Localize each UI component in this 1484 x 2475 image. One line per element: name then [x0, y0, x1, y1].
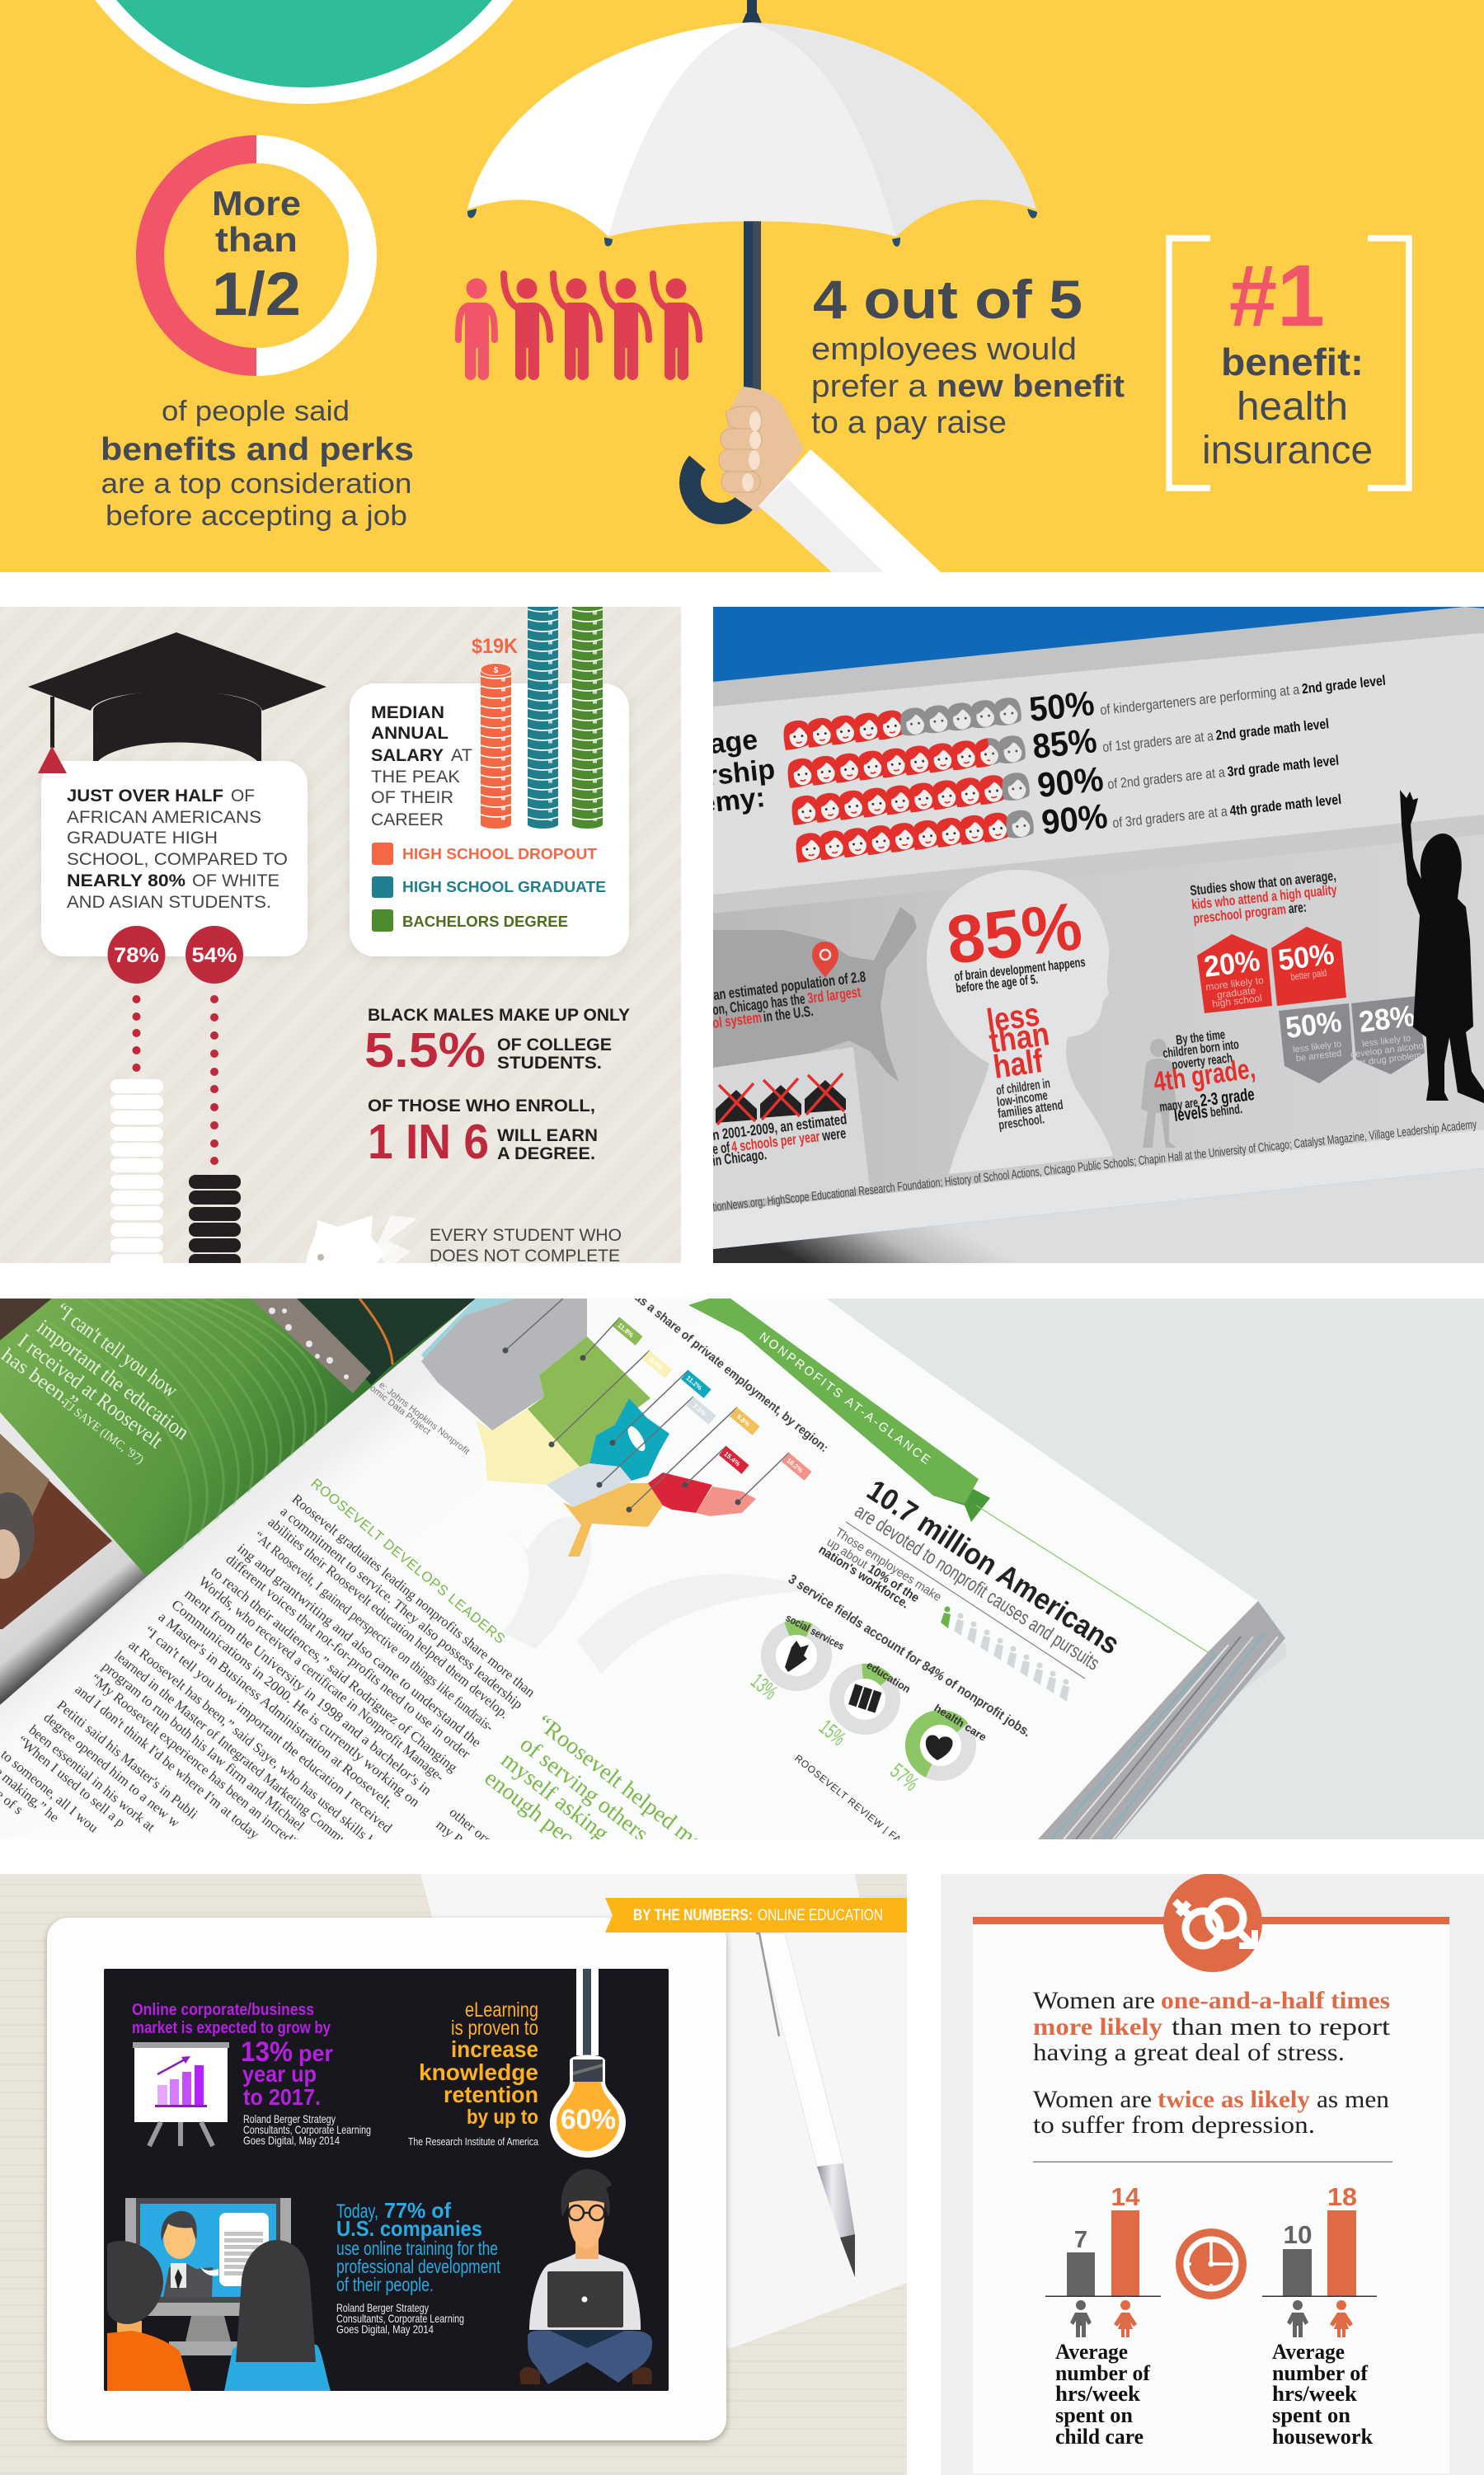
text: 10.7 million Americans: Those employees make — [833, 1525, 944, 1604]
badges: preschool outcome percentages — [1197, 927, 1426, 1083]
map: nonprofit employment by region: 15.4% — [722, 1450, 742, 1468]
icon: child head silhouette with brain statistic: 85% — [943, 889, 1086, 979]
panel: stress and gender infographic — [941, 1874, 1484, 2475]
text: grade level statistics: of 1st graders are at a — [1101, 728, 1214, 755]
text: quality preschool studies: preschool program — [1192, 901, 1287, 927]
map: nonprofit employment by region: 5.4% — [648, 1356, 664, 1371]
text: grade level statistics: 50% — [1027, 683, 1097, 729]
article body text: Roosevelt graduates leading nonprofits share more than — [289, 1491, 538, 1701]
badges: preschool outcome percentages: be arrested — [1295, 1049, 1342, 1064]
badges: preschool outcome percentages: 20% — [1202, 943, 1261, 984]
text: fourth grade poverty: 2-3 grade — [1199, 1085, 1256, 1111]
text: fourth grade poverty: levels — [1173, 1102, 1209, 1125]
text: stress statistics — [1033, 1987, 1391, 2139]
text: grade level statistics — [1027, 673, 1387, 842]
map: nonprofit employment by region — [421, 1299, 812, 1557]
text: benefits and perks: before accepting a job — [106, 500, 407, 532]
pull quote on the photo: important the education — [32, 1315, 194, 1444]
icon: reaching child silhouette — [1400, 790, 1484, 1103]
text: fourth grade poverty: 4th grade, — [1152, 1053, 1257, 1098]
text: black males 5.5 percent: OF COLLEGE — [497, 1036, 612, 1054]
text: 4 out of 5: 4 out of 5 — [813, 269, 1082, 330]
text: map source: omic Data Project — [368, 1383, 432, 1437]
badges: preschool outcome percentages: develop an alcohol — [1350, 1040, 1426, 1060]
icon: graduation cap — [28, 632, 326, 773]
badges: preschool outcome percentages: high school — [1212, 992, 1262, 1010]
text: eLearning retention: knowledge — [419, 2059, 538, 2085]
text: grade level statistics: 85% — [1031, 721, 1099, 766]
text: eLearning retention: increase — [451, 2036, 538, 2062]
text: 4 out of 5: new benefit — [937, 369, 1125, 404]
text: black males 5.5 percent: BLACK MALES MAKE UP ONLY — [368, 1006, 630, 1025]
ribbon: nonprofits at a glance: NONPROFITS AT-A-GLANCE — [757, 1330, 932, 1468]
text: quality preschool studies: are: — [1288, 899, 1308, 917]
map: United States silhouette with Chicago pin — [713, 907, 917, 1082]
bar chart: child care hours: number of — [1055, 2361, 1150, 2385]
card: closed schools: n 2001-2009, an estimated — [713, 1111, 848, 1144]
text: corporate market growth: per — [298, 2041, 333, 2066]
banner: by the numbers: BY THE NUMBERS: — [633, 1907, 753, 1924]
banner: by the numbers — [605, 1898, 907, 1933]
map: nonprofit employment by region: 11.8% — [616, 1322, 635, 1339]
icon: row of five people with raised hands — [458, 274, 699, 380]
tablet frame — [47, 1918, 726, 2440]
badges: preschool outcome percentages: more likely to — [1205, 975, 1265, 993]
text: Chicago school system: in the U.S. — [763, 1003, 815, 1025]
icon: umbrella held in a hand — [467, 0, 1037, 572]
callout: graduation rates: NEARLY 80% — [67, 871, 186, 890]
panel: yellow benefits and perks infographic — [0, 0, 1484, 572]
card: closed schools: were — [820, 1125, 847, 1144]
article body text: Worlds, who received a certificate in Nonprofit Manage- — [195, 1573, 448, 1785]
icon: light bulb with 60 percent — [550, 1969, 626, 2158]
article body text: “When I used to sell a p — [14, 1732, 129, 1830]
bar chart: housework hours: housework — [1272, 2425, 1374, 2449]
text: 77 percent of U.S. companies: of their people. — [336, 2274, 434, 2295]
card: closed schools — [711, 1047, 870, 1204]
text: corporate market growth: 13% — [241, 2036, 293, 2068]
text: every student who does not complete: EVERY STUDENT WHO — [430, 1226, 622, 1245]
banner: by the numbers: ONLINE EDUCATION — [758, 1907, 883, 1924]
text: corporate market growth: to 2017. — [243, 2084, 321, 2110]
map: nonprofit employment by region: 16.2% — [785, 1457, 805, 1474]
icon: child head silhouette with brain statistic: low-income — [996, 1088, 1049, 1110]
icon: child head silhouette with brain statistic: of children in — [995, 1077, 1051, 1098]
bar chart: housework hours: Average — [1272, 2340, 1345, 2364]
text: stress statistics: Women are — [1033, 1987, 1155, 2014]
bar chart: housework hours: hrs/week — [1272, 2382, 1358, 2406]
chart: health care donut: 57% — [885, 1759, 923, 1796]
text: one in six earn a degree: OF THOSE WHO ENROLL, — [368, 1097, 595, 1115]
pull quote on the photo: I received at Roosevelt — [13, 1329, 168, 1454]
article body text: degree opened him to a new w — [40, 1709, 183, 1831]
text: stress statistics: having a great deal of stress. — [1033, 2039, 1345, 2066]
callout: graduation rates — [41, 761, 308, 956]
text: fourth grade poverty: children born into — [1162, 1038, 1240, 1061]
text: eLearning retention: by up to — [467, 2106, 538, 2129]
text: eLearning retention: The Research Institute of America — [408, 2135, 539, 2148]
chart: coin stacks of salary — [472, 607, 603, 829]
chart: social services donut: social services — [784, 1611, 847, 1652]
article body text: ment from the University in 1998 and a bachelor's in — [181, 1585, 435, 1798]
callout: median annual salary — [350, 683, 629, 956]
text: 77 percent of U.S. companies: use online training for the — [336, 2238, 498, 2259]
text: stress statistics: than men to report — [1172, 2013, 1391, 2041]
badges: preschool outcome percentages: 50% — [1276, 937, 1336, 977]
text: benefits and perks: benefits and perks — [101, 432, 414, 467]
brochure sheet — [713, 607, 1484, 1249]
text: quality preschool studies — [1189, 867, 1338, 927]
bar chart: housework hours: spent on — [1272, 2403, 1351, 2427]
article body text — [0, 1491, 538, 1859]
pull quote on the photo: TJ SAYE (IMC, '97) — [59, 1397, 146, 1467]
text: 4 out of 5: prefer a — [811, 369, 928, 404]
text: every student who does not complete — [430, 1226, 622, 1266]
legend: education levels — [372, 843, 606, 932]
chart: 78 percent stack of white bars — [107, 926, 165, 1268]
callout: number one benefit in brackets: #1 — [1229, 247, 1325, 345]
ribbon: nonprofits at a glance — [688, 1299, 1208, 1652]
chart: education donut: education — [864, 1659, 913, 1695]
map: nonprofit employment by region: 7.1% — [692, 1402, 707, 1417]
donut: more than one half: More — [212, 184, 301, 223]
text: corporate market growth — [132, 2001, 333, 2110]
text: stress statistics: one-and-a-half times — [1161, 1987, 1390, 2014]
badges: preschool outcome percentages: less likely to — [1292, 1039, 1342, 1055]
icon: small child silhouette — [1141, 1039, 1176, 1148]
text: benefits and perks: of people said — [162, 396, 350, 427]
text: 10.7 million Americans: up about 10% of the — [824, 1535, 922, 1605]
text: 10.7 million Americans: are devoted to nonprofit causes and pursuits — [851, 1500, 1103, 1675]
chart: 78 percent stack of white bars: 78% — [114, 944, 159, 967]
callout: median annual salary: ANNUAL — [371, 724, 448, 743]
bar chart: housework hours: 10 — [1283, 2220, 1313, 2249]
bar chart: child care hours: 14 — [1111, 2182, 1140, 2211]
chart: social services donut: 13% — [746, 1669, 782, 1704]
left page with photo — [0, 1299, 476, 1705]
icon: child head silhouette with brain statistic: half — [991, 1043, 1045, 1086]
card: closed schools: 4 schools per year — [730, 1128, 821, 1155]
text: source one: Roland Berger Strategy — [243, 2112, 336, 2125]
chart: health care donut: health care — [932, 1702, 989, 1744]
map: nonprofit employment by region: 9.8% — [735, 1413, 751, 1428]
text: grade level statistics: 2nd grade math level — [1215, 716, 1330, 744]
text: 4 out of 5: to a pay raise — [811, 406, 1007, 440]
text: eLearning retention: eLearning — [465, 1998, 538, 2022]
callout: median annual salary: THE PEAK — [371, 768, 460, 787]
article body text: Communications in 2000. He is currently working on — [168, 1596, 423, 1810]
card — [973, 1921, 1449, 2473]
text: benefits and perks: are a top consideration — [101, 468, 412, 500]
text: quality preschool studies: Studies show that on average, — [1189, 867, 1336, 899]
heading: cropped title — [698, 724, 777, 820]
illustration: man with laptop — [519, 2169, 652, 2384]
text: grade level statistics: 90% — [1040, 796, 1110, 842]
article body text: a Master's in Business Administration at Roosevelt. — [155, 1609, 397, 1812]
article body text: to someone, all I wou — [0, 1746, 101, 1836]
panel: African American graduation infographic — [0, 607, 681, 1263]
text: fourth grade poverty: many are — [1158, 1096, 1199, 1115]
article body text: Petitti said his Master's in Publi — [54, 1697, 201, 1822]
text: grade level statistics: of 2nd graders are at a — [1106, 764, 1226, 792]
text: black males 5.5 percent: 5.5% — [364, 1023, 486, 1078]
icon: presentation board with bars — [133, 2042, 229, 2146]
icon: light bulb with 60 percent: 60% — [561, 2104, 616, 2135]
callout: number one benefit in brackets: benefit: — [1221, 340, 1364, 383]
article body text: “At Roosevelt, I gained perspective on things like fundrais- — [251, 1528, 497, 1735]
bar chart: child care hours: child care — [1055, 2425, 1144, 2449]
text: eLearning retention — [408, 1998, 539, 2148]
icon: child head silhouette with brain statistic: less — [984, 996, 1042, 1040]
panel: open magazine photo — [0, 1299, 1484, 1839]
text: source one — [243, 2112, 371, 2147]
text: 77 percent of U.S. companies — [336, 2198, 500, 2295]
bar chart: housework hours: number of — [1272, 2361, 1368, 2385]
badges: preschool outcome percentages: 50% — [1284, 1004, 1343, 1045]
bar chart: housework hours: 18 — [1327, 2182, 1357, 2211]
legend: education levels: BACHELORS DEGREE — [402, 913, 568, 930]
text: three service fields: 3 service fields account for 84% of nonprofit jobs. — [786, 1572, 1033, 1740]
badges: preschool outcome percentages: or drug problem — [1357, 1050, 1422, 1068]
badges: preschool outcome percentages: better paid — [1290, 967, 1327, 983]
bar chart: child care hours: 7 — [1074, 2227, 1087, 2253]
text: fourth grade poverty — [1152, 1028, 1257, 1125]
text: source one: Consultants, Corporate Learning — [243, 2123, 371, 2136]
callout: graduation rates: SCHOOL, COMPARED TO — [67, 850, 288, 869]
callout: graduation rates: OF WHITE — [192, 871, 279, 890]
text: stress statistics: twice as likely — [1158, 2086, 1310, 2113]
text: source two: Goes Digital, May 2014 — [336, 2322, 434, 2336]
text: corporate market growth: year up — [242, 2061, 317, 2087]
article body text: “I can't tell you how important the education I received — [141, 1623, 395, 1836]
text: stress statistics: as men — [1317, 2086, 1389, 2113]
text: source two: Roland Berger Strategy — [336, 2301, 429, 2314]
text: one in six earn a degree: WILL EARN — [497, 1126, 598, 1145]
chart: coin stacks of salary: $19K — [472, 635, 518, 658]
text: 77 percent of U.S. companies: Today, — [336, 2200, 378, 2223]
text: map source: e: Johns Hopkins Nonprofit — [377, 1380, 472, 1457]
pen — [756, 1933, 855, 2277]
bar chart: housework hours — [1262, 2182, 1377, 2449]
callout: median annual salary: OF THEIR — [371, 788, 453, 807]
text: grade level statistics: 4th grade math level — [1229, 791, 1342, 819]
callout: median annual salary: MEDIAN — [371, 703, 444, 722]
text: grade level statistics: 90% — [1036, 759, 1106, 805]
article body text: a commitment to service. They also possess leadership — [277, 1503, 526, 1712]
callout: graduation rates: JUST OVER HALF — [67, 787, 223, 805]
text: source two: Consultants, Corporate Learning — [336, 2312, 464, 2325]
icon: broken piggy bank — [305, 1215, 417, 1270]
article body text: been essential in his work at — [26, 1721, 158, 1834]
text: 4 out of 5: employees would — [811, 332, 1077, 367]
donut: more than one half: 1/2 — [212, 260, 301, 328]
chart: social services donut — [746, 1611, 847, 1704]
text: 10.7 million Americans: 10.7 million Americans — [862, 1472, 1126, 1661]
text: quality preschool studies: kids who attend a high quality — [1190, 882, 1338, 913]
text: one in six earn a degree: 1 IN 6 — [368, 1115, 489, 1169]
text: eLearning retention: is proven to — [451, 2017, 538, 2040]
article body text: and I don't think I'd be where I'm at today — [72, 1681, 263, 1839]
icon: child head silhouette with brain statistic: than — [987, 1016, 1052, 1060]
text: 4 out of 5 — [811, 269, 1125, 440]
icon: child head silhouette with brain statistic: preschool. — [998, 1112, 1045, 1133]
text: Chicago school system: on, Chicago has the — [713, 990, 806, 1018]
badges: preschool outcome percentages: 28% — [1357, 998, 1416, 1039]
text: grade level statistics: 2nd grade level — [1301, 673, 1387, 697]
chart: education donut — [815, 1659, 913, 1750]
text: Chicago school system: ol system — [713, 1009, 763, 1031]
bar chart: child care hours: hrs/week — [1055, 2382, 1141, 2406]
legend: education levels: HIGH SCHOOL DROPOUT — [402, 846, 597, 862]
badges: preschool outcome percentages: graduate — [1216, 984, 1256, 1001]
chart: 54 percent stack of black bars — [186, 926, 243, 1268]
bar chart: child care hours: spent on — [1055, 2403, 1134, 2427]
callout: median annual salary: CAREER — [371, 810, 444, 829]
callout: number one benefit in brackets: insurance — [1202, 429, 1373, 472]
article heading: ROOSEVELT DEVELOPS LEADERS — [308, 1476, 508, 1647]
chart: education donut: 15% — [815, 1715, 851, 1750]
text: grade level statistics: of 3rd graders are at a — [1111, 803, 1228, 831]
text: grade level statistics: 3rd grade math level — [1227, 753, 1340, 780]
panel: early childhood brochure photo — [713, 607, 1484, 1263]
icon: child head silhouette with brain statistic: of brain development happens — [954, 956, 1086, 984]
text: stress statistics: more likely — [1033, 2013, 1162, 2041]
icon: child head silhouette with brain statistic: families attend — [997, 1098, 1064, 1121]
article body text: different voices that not-for-profits need to use in order — [223, 1551, 473, 1762]
text: corporate market growth: market is expected to grow by — [132, 2019, 331, 2037]
callout: graduation rates: AFRICAN AMERICANS — [67, 808, 261, 827]
bar chart: child care hours — [1045, 2182, 1161, 2449]
text: Chicago school system: 3rd largest — [806, 984, 862, 1007]
card: closed schools: in Chicago. — [713, 1146, 768, 1169]
page stack edge — [1038, 1601, 1285, 1839]
text: 77 percent of U.S. companies: professional development — [336, 2256, 500, 2277]
text: one in six earn a degree — [368, 1097, 598, 1169]
text: source two — [336, 2301, 464, 2336]
chart: coin stacks of salary: $ — [494, 666, 499, 675]
right magazine page — [0, 1299, 1258, 1839]
text: one in six earn a degree: A DEGREE. — [497, 1144, 595, 1163]
text: 77 percent of U.S. companies: U.S. companies — [336, 2216, 482, 2241]
article body text: abilities their Roosevelt education helped them develop. — [265, 1514, 512, 1721]
text: grade level statistics: of kindergarteners are performing at a — [1099, 682, 1301, 718]
text: eLearning retention: retention — [444, 2082, 538, 2107]
callout: graduation rates: OF — [231, 787, 255, 805]
map: nonprofit employment by region: 11.2% — [684, 1374, 703, 1392]
illustration: video conference audience — [107, 2198, 331, 2391]
icon: male and female symbols — [1163, 1873, 1262, 1972]
article body text: program to run both his law firm and Michael — [99, 1658, 308, 1834]
text: black males 5.5 percent: STUDENTS. — [497, 1054, 602, 1073]
text: source one: Goes Digital, May 2014 — [243, 2134, 340, 2147]
callout: number one benefit in brackets — [1169, 238, 1409, 488]
donut: more than one half — [136, 135, 377, 376]
text: stress statistics: to suffer from depression. — [1033, 2111, 1315, 2139]
text: stress statistics: Women are — [1033, 2086, 1152, 2113]
callout: graduation rates: GRADUATE HIGH — [67, 829, 218, 848]
legend: education levels: HIGH SCHOOL GRADUATE — [402, 879, 606, 895]
callout: median annual salary: AT — [451, 746, 472, 765]
badges: preschool outcome percentages: less likely to — [1361, 1033, 1411, 1050]
icon: child head silhouette with brain statistic — [927, 870, 1113, 1174]
chart: rows of student faces — [782, 697, 1035, 863]
chart: 54 percent stack of black bars: 54% — [191, 944, 237, 967]
donut: more than one half: than — [215, 220, 298, 259]
text: benefits and perks — [101, 396, 414, 532]
text: fourth grade poverty: By the time — [1175, 1028, 1226, 1048]
callout: number one benefit in brackets: health — [1237, 385, 1348, 429]
text: 77 percent of U.S. companies: 77% of — [384, 2198, 451, 2223]
text: fourth grade poverty: behind. — [1209, 1102, 1243, 1120]
icon: clock — [1176, 2228, 1247, 2299]
callout: graduation rates: AND ASIAN STUDENTS. — [67, 893, 271, 912]
icons: ten people with one highlighted — [941, 1606, 1069, 1702]
text: Chicago school system: an estimated population of 2.8 — [713, 968, 866, 1003]
text: Chicago school system — [711, 968, 866, 1031]
chart: health care donut — [885, 1702, 989, 1796]
text: 10.7 million Americans: nation's workforce. — [816, 1543, 912, 1612]
teal circle cropped at the top — [42, 0, 566, 104]
text: fourth grade poverty: poverty reach — [1171, 1051, 1233, 1073]
bar chart: child care hours: Average — [1055, 2340, 1128, 2364]
text: corporate market growth: Online corporate/business — [132, 2001, 314, 2019]
callout: median annual salary: SALARY — [371, 746, 444, 765]
article body text: ing and grantwriting and also came to understand the — [234, 1540, 484, 1750]
icon: child head silhouette with brain statistic: before the age of 5. — [956, 973, 1039, 996]
article body text: to reach their audiences,” said Rodriguez of Changing — [208, 1563, 461, 1776]
green pull quote — [480, 1710, 708, 1865]
text: black males 5.5 percent — [364, 1006, 630, 1078]
pull quote on the photo: “I can't tell you how — [51, 1299, 182, 1402]
tablet screen — [104, 1969, 669, 2391]
panel: online education on tablet photo — [0, 1874, 907, 2475]
